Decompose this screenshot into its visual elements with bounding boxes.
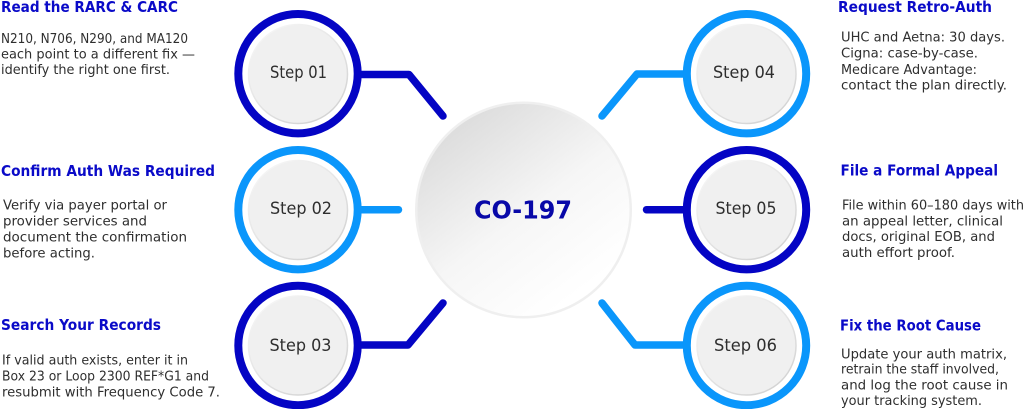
text block: Read the RARC & CARC: each point to a different fix — <box>1 46 195 62</box>
step 05 badge <box>687 150 806 269</box>
text block: File a Formal Appeal: an appeal letter, clinical <box>842 214 1003 230</box>
connector: step 02 <box>360 206 398 213</box>
text block: Fix the Root Cause: your tracking system. <box>841 393 982 409</box>
text block: Confirm Auth Was Required: before acting. <box>3 246 95 262</box>
text block: Read the RARC & CARC: N210, N706, N290, and MA120 <box>1 31 188 47</box>
text block: Request Retro-Auth: Cigna: case-by-case. <box>841 46 978 62</box>
text block: Fix the Root Cause <box>840 318 1008 409</box>
text block: File a Formal Appeal: auth effort proof. <box>842 245 955 261</box>
step 03 badge <box>238 286 358 405</box>
step 02 badge <box>238 150 358 269</box>
step 04 badge <box>687 14 806 133</box>
connector: step 06 <box>602 303 685 345</box>
text block: Search Your Records <box>1 317 220 400</box>
text block: File a Formal Appeal <box>840 163 1024 261</box>
text block: Search Your Records: If valid auth exists, enter it in <box>2 352 188 368</box>
text block: Confirm Auth Was Required: Confirm Auth Was Required <box>1 163 215 180</box>
connector: step 01 <box>360 74 443 116</box>
text block: Confirm Auth Was Required: provider services and <box>3 214 147 230</box>
text block: Search Your Records: Search Your Records <box>1 317 161 334</box>
text block: Search Your Records: Box 23 or Loop 2300 REF*G1 and <box>2 368 209 384</box>
step 05 badge: Step 05 <box>716 199 776 219</box>
text block: File a Formal Appeal: docs, original EOB, and <box>842 229 995 245</box>
step 03 badge: Step 03 <box>270 336 332 356</box>
step 01 badge: Step 01 <box>270 63 327 83</box>
step 02 badge: Step 02 <box>270 199 332 219</box>
text block: Confirm Auth Was Required: document the confirmation <box>3 230 187 246</box>
text block: Request Retro-Auth: UHC and Aetna: 30 days. <box>841 30 1005 46</box>
step 06 badge <box>687 286 806 405</box>
text block: Fix the Root Cause: retrain the staff involved, <box>841 362 999 378</box>
text block: Confirm Auth Was Required <box>1 163 215 262</box>
connector: step 04 <box>602 74 685 116</box>
text block: Request Retro-Auth: contact the plan directly. <box>841 78 1007 94</box>
text block: Confirm Auth Was Required: Verify via payer portal or <box>3 198 167 214</box>
text block: Request Retro-Auth <box>838 0 1007 94</box>
text block: Read the RARC & CARC <box>1 0 195 78</box>
connector: step 05 <box>646 206 685 213</box>
step 04 badge: Step 04 <box>713 63 775 83</box>
text block: Read the RARC & CARC: identify the right one first. <box>1 62 170 78</box>
text block: Search Your Records: resubmit with Frequency Code 7. <box>2 384 220 400</box>
central hub <box>415 102 632 318</box>
connector: step 03 <box>360 303 443 345</box>
central hub: CO-197 <box>474 195 572 224</box>
step 06 badge: Step 06 <box>714 336 777 356</box>
text block: Fix the Root Cause: Fix the Root Cause <box>840 318 981 335</box>
text block: Request Retro-Auth: Medicare Advantage: <box>841 62 977 78</box>
step 01 badge <box>238 14 358 133</box>
text block: File a Formal Appeal: File a Formal Appeal <box>840 163 998 180</box>
text block: Fix the Root Cause: Update your auth matrix, <box>841 346 1007 362</box>
text block: Fix the Root Cause: and log the root cause in <box>841 377 1008 393</box>
